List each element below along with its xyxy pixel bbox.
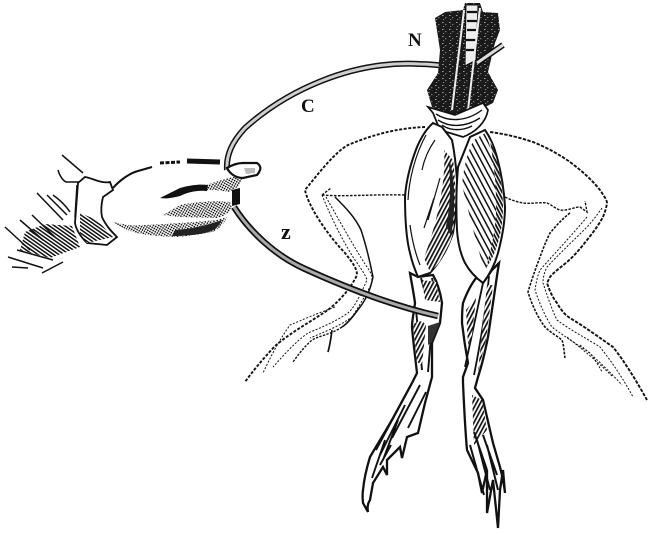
body band [428, 103, 488, 137]
label N: N [408, 30, 422, 51]
label C: C [301, 96, 315, 117]
galvanic arc: lower wire Z [234, 207, 438, 316]
left thigh [405, 123, 457, 277]
finger shading [207, 175, 243, 192]
right thigh [456, 130, 505, 283]
finger joint dark [232, 188, 240, 206]
hand holding arc [5, 155, 260, 273]
frog spine and upper body [427, 3, 503, 137]
label z: z [281, 219, 291, 244]
left lower leg and foot [363, 273, 442, 512]
ghost frog leg left: dotted outline [245, 127, 425, 382]
palm outline [113, 167, 152, 188]
cuff [75, 177, 117, 245]
right lower leg and foot [462, 263, 505, 528]
galvanic arc: upper wire C [227, 64, 456, 170]
thumb [227, 163, 260, 178]
sleeve [20, 224, 80, 258]
ghost frog leg right: dotted outline [490, 132, 647, 400]
